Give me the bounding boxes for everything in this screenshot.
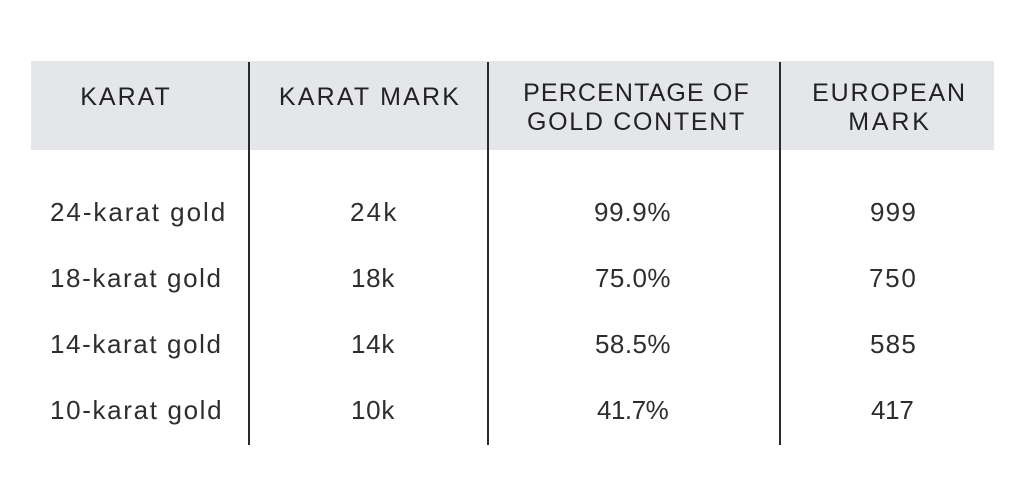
heading: karat mark: KARAT MARK bbox=[279, 83, 461, 111]
row: 10-karat gold: 417 bbox=[871, 395, 913, 425]
row: 24-karat gold: 999 bbox=[870, 197, 917, 227]
heading: european mark: EUROPEAN bbox=[812, 79, 967, 107]
row: 14-karat gold: 58.5% bbox=[595, 329, 671, 359]
heading: percentage of gold content: GOLD CONTENT bbox=[527, 108, 746, 136]
column divider 1 bbox=[248, 62, 250, 445]
row: 24-karat gold bbox=[50, 197, 917, 227]
row: 10-karat gold: 10k bbox=[351, 395, 395, 425]
row: 24-karat gold: 99.9% bbox=[594, 197, 671, 227]
row: 24-karat gold: 24-karat gold bbox=[50, 197, 227, 227]
row: 18-karat gold: 75.0% bbox=[595, 263, 671, 293]
heading: european mark: MARK bbox=[848, 108, 932, 136]
row: 18-karat gold: 750 bbox=[869, 263, 917, 293]
row: 14-karat gold: 585 bbox=[870, 329, 917, 359]
heading: percentage of gold content bbox=[523, 79, 750, 136]
heading: percentage of gold content: PERCENTAGE OF bbox=[523, 79, 750, 107]
heading: european mark bbox=[812, 79, 967, 136]
row: 18-karat gold: 18k bbox=[351, 263, 395, 293]
table header band bbox=[31, 61, 994, 150]
row: 10-karat gold: 10-karat gold bbox=[50, 395, 223, 425]
row: 18-karat gold: 18-karat gold bbox=[50, 263, 223, 293]
row: 10-karat gold: 41.7% bbox=[597, 395, 668, 425]
row: 14-karat gold bbox=[50, 329, 917, 359]
column divider 2 bbox=[487, 62, 489, 445]
row: 24-karat gold: 24k bbox=[350, 197, 399, 227]
row: 10-karat gold bbox=[50, 395, 913, 425]
row: 18-karat gold bbox=[50, 263, 917, 293]
heading: karat: KARAT bbox=[80, 83, 172, 111]
column divider 3 bbox=[779, 62, 781, 445]
row: 14-karat gold: 14k bbox=[351, 329, 395, 359]
row: 14-karat gold: 14-karat gold bbox=[50, 329, 223, 359]
